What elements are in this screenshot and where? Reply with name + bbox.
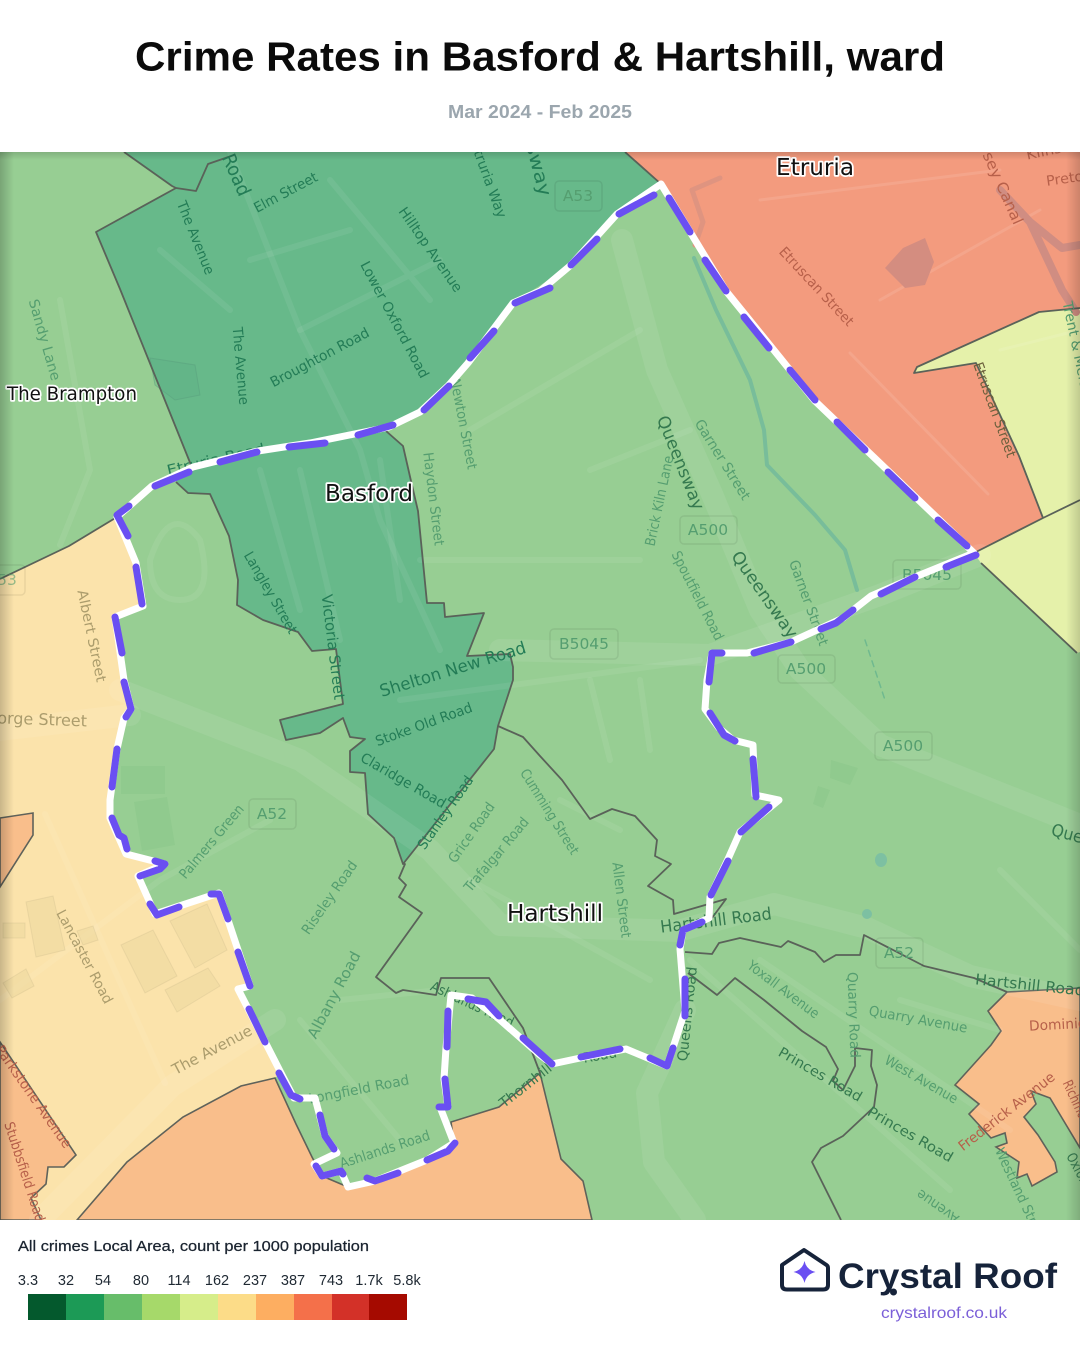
shield: B5045 west — [550, 629, 618, 659]
shield: A53 west edge — [0, 565, 25, 595]
street label: Etruscan Street — [969, 360, 1019, 460]
shield: A500 centre — [680, 516, 737, 544]
shield: B5045 west: B5045 — [559, 635, 609, 653]
building footprints and sports pitches — [2, 358, 228, 1012]
street label: Elm Street — [251, 169, 321, 216]
region: pale yellow east — [974, 500, 1080, 653]
street label: Frederick Avenue — [956, 1069, 1058, 1155]
street label: Queensway — [652, 413, 708, 513]
logo wordmark: Crystal Roof — [838, 1257, 1057, 1296]
street label: Victoria Street — [318, 593, 348, 701]
street label: Thornhill — [496, 1061, 555, 1112]
legend scale numbers: 3.3 — [18, 1273, 38, 1289]
place label: Etruria: Etruria — [776, 155, 854, 181]
boundary white base line — [110, 184, 974, 1187]
street label: Trafalgar Road — [461, 815, 533, 896]
shield: A52 east — [876, 938, 923, 968]
legend title: All crimes Local Area, count per 1000 population — [18, 1239, 369, 1255]
street label: Longfield Road — [307, 1072, 411, 1108]
shield: A53 north: A53 — [563, 187, 593, 205]
shield: B5045 east — [893, 560, 961, 589]
shield: A52 west: A52 — [257, 805, 287, 823]
region: Basford south, darker green — [176, 431, 513, 864]
street label: Queensway — [503, 73, 555, 199]
street label: Hartshill Road — [974, 970, 1080, 1000]
region: orange Dominion Road area — [955, 988, 1080, 1186]
neighbouring area boundaries — [0, 152, 1080, 1220]
street label: Albany Road — [304, 948, 364, 1042]
legend scale numbers: 162 — [205, 1273, 229, 1289]
street label: Etruria Road — [165, 441, 267, 479]
street label: Haydon Street — [419, 451, 447, 547]
street label: Allen Street — [608, 861, 634, 939]
boundary purple dashes — [112, 195, 976, 1181]
street label: Princes Road — [864, 1104, 956, 1166]
street label: The Avenue — [168, 1021, 255, 1079]
street label: Broughton Road — [268, 325, 372, 391]
street label: Yoxall Avenue — [743, 957, 822, 1022]
shield: A52 west — [249, 799, 296, 829]
street label: Riseley Road — [299, 858, 361, 938]
street label: West Avenue — [881, 1053, 961, 1107]
shield: A500 south: A500 — [786, 660, 826, 678]
legend scale numbers — [18, 1273, 421, 1289]
street label: Langley Street — [240, 549, 300, 637]
region: orange south west pieces — [0, 813, 76, 1220]
street label: Brick Kiln Lane — [643, 454, 677, 548]
map edge vignette — [0, 152, 1080, 1220]
street label: Hartshill Road — [659, 904, 773, 938]
legend scale numbers: 114 — [167, 1273, 191, 1289]
legend scale numbers: 387 — [281, 1273, 305, 1289]
logo y descender dot — [890, 1288, 897, 1296]
logo: Crystal Roof — [782, 1250, 1057, 1322]
shield: A500 south — [778, 655, 835, 683]
street label: Spoutfield Road — [668, 549, 726, 643]
legend scale numbers: 80 — [133, 1273, 149, 1289]
region: yellow west — [0, 517, 281, 1220]
canal and water features — [692, 178, 1080, 700]
base light green area — [0, 152, 1080, 1220]
ward boundary: Basford & Hartshill dashed outline — [110, 184, 976, 1187]
street label: Ashlands Road — [338, 1128, 432, 1172]
street label: Hilltop Avenue — [395, 204, 465, 296]
legend scale numbers: 32 — [58, 1273, 74, 1289]
street label: Palmers Green — [176, 802, 248, 882]
place label: Basford: Basford — [325, 481, 413, 507]
website link: crystalroof.co.uk — [881, 1305, 1008, 1322]
street label: Queens Road — [675, 966, 701, 1062]
street label: Princes Road — [775, 1045, 865, 1105]
region: pale yellow north east — [914, 308, 1080, 518]
street label: Westland Street — [991, 1145, 1049, 1245]
legend scale numbers: 743 — [319, 1273, 343, 1289]
region: orange south — [77, 1073, 592, 1220]
street label: Stanley Road — [415, 773, 477, 853]
street label: Road — [582, 1045, 618, 1067]
legend scale numbers: 237 — [243, 1273, 267, 1289]
street label: Queensway — [727, 547, 801, 643]
subtitle: date range: Mar 2024 - Feb 2025 — [448, 102, 632, 122]
street label: Road — [217, 150, 255, 200]
shield: A52 east: A52 — [884, 944, 914, 962]
street label: Etruscan Street — [775, 244, 857, 330]
street label: Garner Street — [691, 417, 753, 504]
shield: A500 east: A500 — [883, 737, 923, 755]
place label: Hartshill: Hartshill — [507, 901, 603, 927]
place labels — [6, 155, 854, 927]
street label: Shelton New Road — [377, 638, 529, 702]
legend scale numbers: 54 — [95, 1273, 111, 1289]
legend scale numbers: 1.7k — [355, 1273, 383, 1289]
shield: A500 east — [875, 732, 932, 760]
street label: Etruria Way — [467, 140, 509, 220]
street label: Trent & Mersey Canal — [941, 64, 1027, 227]
legend scale numbers: 5.8k — [393, 1273, 421, 1289]
ponds in Hartshill park — [862, 853, 887, 919]
street label: Garner Street — [785, 558, 831, 648]
place label: The Brampton: The Brampton — [6, 383, 137, 405]
shield: A500 centre: A500 — [688, 521, 728, 539]
street label: Quarry Avenue — [867, 1003, 969, 1037]
street label: Kilns — [1025, 140, 1063, 164]
street label: Avenue — [914, 1186, 962, 1226]
region: Basford north, darker green — [96, 152, 661, 465]
shield: B5045 east: B5045 — [902, 566, 952, 584]
street label: Albert Street — [73, 588, 109, 684]
region: Etruria, high crime — [625, 152, 1080, 553]
title: Crime Rates in Basford & Hartshill, ward — [135, 34, 945, 80]
street label: Claridge Road — [357, 750, 449, 812]
street label: Cumming Street — [516, 766, 582, 858]
street label: Newton Street — [446, 377, 480, 471]
road network overlay — [0, 152, 1080, 1220]
legend — [18, 1239, 421, 1320]
Etruria reservoir — [885, 238, 934, 288]
street label: Lancaster Road — [53, 907, 115, 1007]
street label: The Avenue — [229, 326, 251, 406]
street label: Stubbsfield Road — [0, 1120, 48, 1224]
road shields — [0, 181, 961, 968]
street label: Lower Oxford Road — [356, 259, 432, 381]
legend colour scale — [28, 1294, 407, 1320]
street label: Quarry Road — [844, 972, 862, 1058]
street label: Stoke Old Road — [373, 700, 475, 750]
icon: house with star — [782, 1250, 828, 1290]
street label: Grice Road — [445, 800, 499, 866]
street label: The Avenue — [173, 198, 217, 277]
street label: Sandy Lane — [25, 297, 63, 383]
shield: A53 north — [555, 181, 602, 211]
street label: Ashlands Road — [428, 979, 516, 1031]
